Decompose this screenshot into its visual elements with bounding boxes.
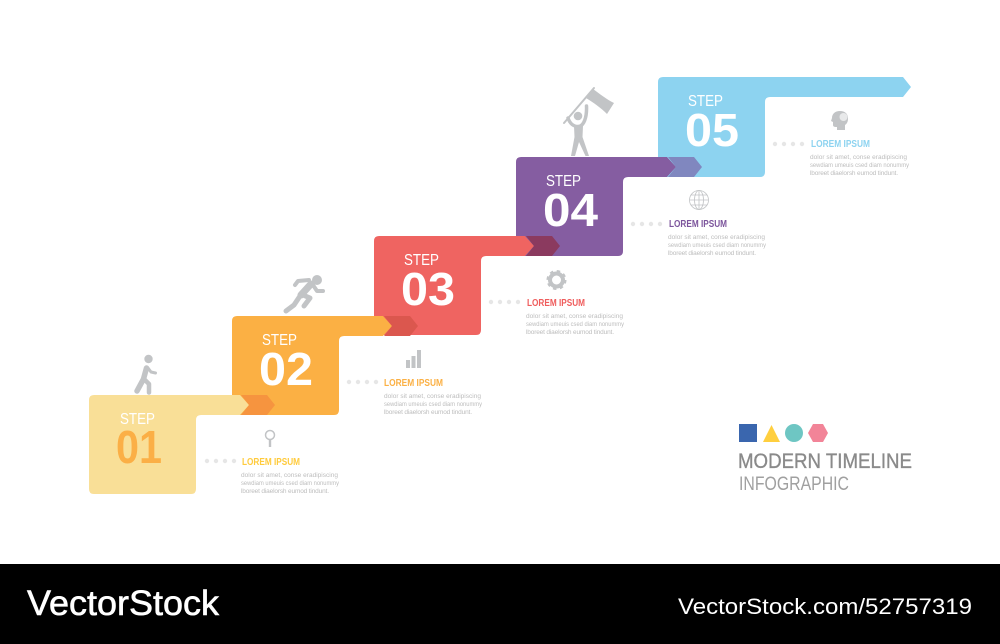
pink hexagon (808, 424, 828, 442)
step 3 description: dolor sit amet, conse eradipiscing (526, 313, 623, 320)
step 3 dots (489, 300, 520, 304)
step 3 description: sewdiam umeuis csed diam nonummy (526, 321, 625, 328)
step 1 description: sewdiam umeuis csed diam nonummy (241, 480, 340, 487)
panel: step 2 (232, 316, 483, 416)
panel: step 3 (374, 236, 625, 336)
step 1 chevron (241, 395, 275, 415)
step 2 description: sewdiam umeuis csed diam nonummy (384, 401, 483, 408)
footer bar (0, 564, 1000, 644)
icon: globe (690, 190, 708, 210)
icon: figure with flag (564, 88, 614, 156)
legend title: MODERN TIMELINE (738, 450, 912, 473)
figure body (571, 126, 589, 156)
step 5 number: 05 (685, 104, 739, 156)
step 3 heading: LOREM IPSUM (527, 298, 585, 309)
step 1 heading: LOREM IPSUM (242, 457, 300, 468)
step 4 ribbon (516, 157, 676, 256)
figure arms (568, 106, 587, 126)
step 2 description: dolor sit amet, conse eradipiscing (384, 393, 481, 400)
step 5 description: sewdiam umeuis csed diam nonummy (810, 162, 910, 169)
step 2 chevron (384, 316, 418, 336)
yellow triangle (763, 425, 780, 442)
step 5 dots (773, 142, 804, 146)
step 4 number: 04 (543, 184, 598, 236)
step 4 label: STEP (546, 173, 581, 190)
step 1 dots (205, 459, 236, 463)
step 4 dots (631, 222, 662, 226)
step 4 description: dolor sit amet, conse eradipiscing (668, 234, 765, 241)
step 2 dots (347, 380, 378, 384)
teal circle (785, 424, 803, 442)
icon: head (831, 111, 848, 130)
step 3 number: 03 (401, 263, 455, 315)
step 2 ribbon (232, 316, 392, 415)
step 2 heading: LOREM IPSUM (384, 378, 443, 389)
step 5 ribbon (658, 77, 911, 177)
icon: gear (548, 272, 565, 288)
icon: magnifier (266, 430, 274, 447)
step 5 heading: LOREM IPSUM (811, 139, 870, 150)
step 1 ribbon (89, 395, 249, 494)
icon: bar chart (406, 350, 421, 368)
step 2 label: STEP (262, 332, 297, 349)
figure head (574, 112, 582, 120)
icon: walking figure (137, 355, 156, 392)
step 5 description: dolor sit amet, conse eradipiscing (810, 154, 907, 161)
step 3 description: lboreet diaelorsh eumod tindunt. (526, 329, 614, 336)
step 3 ribbon (374, 236, 534, 335)
step 5 label: STEP (688, 93, 723, 110)
blue square (739, 424, 757, 442)
legend subtitle: INFOGRAPHIC (739, 474, 849, 495)
panel: step 4 (516, 157, 767, 257)
footer image id: VectorStock.com/52757319 (678, 594, 972, 619)
step 2 number: 02 (259, 343, 313, 395)
step 1 number: 01 (116, 421, 162, 473)
step 1 description: dolor sit amet, conse eradipiscing (241, 472, 338, 479)
step 3 chevron (526, 236, 560, 256)
step 5 description: lboreet diaelorsh eumod tindunt. (810, 170, 898, 177)
step 4 description: sewdiam umeuis csed diam nonummy (668, 242, 767, 249)
step 1 description: lboreet diaelorsh eumod tindunt. (241, 488, 329, 495)
legend: shapes and title (738, 424, 912, 495)
step 4 description: lboreet diaelorsh eumod tindunt. (668, 250, 756, 257)
footer brand: VectorStock (27, 584, 220, 623)
step 4 chevron (668, 157, 702, 177)
icon: running figure (286, 275, 323, 311)
flag pole (564, 88, 594, 123)
step 2 description: lboreet diaelorsh eumod tindunt. (384, 409, 472, 416)
step 1 label: STEP (120, 411, 155, 428)
flag (586, 89, 614, 114)
panel: step 5 (658, 77, 911, 177)
step 3 label: STEP (404, 252, 439, 269)
step 4 heading: LOREM IPSUM (669, 219, 727, 230)
panel: step 1 (89, 395, 340, 495)
